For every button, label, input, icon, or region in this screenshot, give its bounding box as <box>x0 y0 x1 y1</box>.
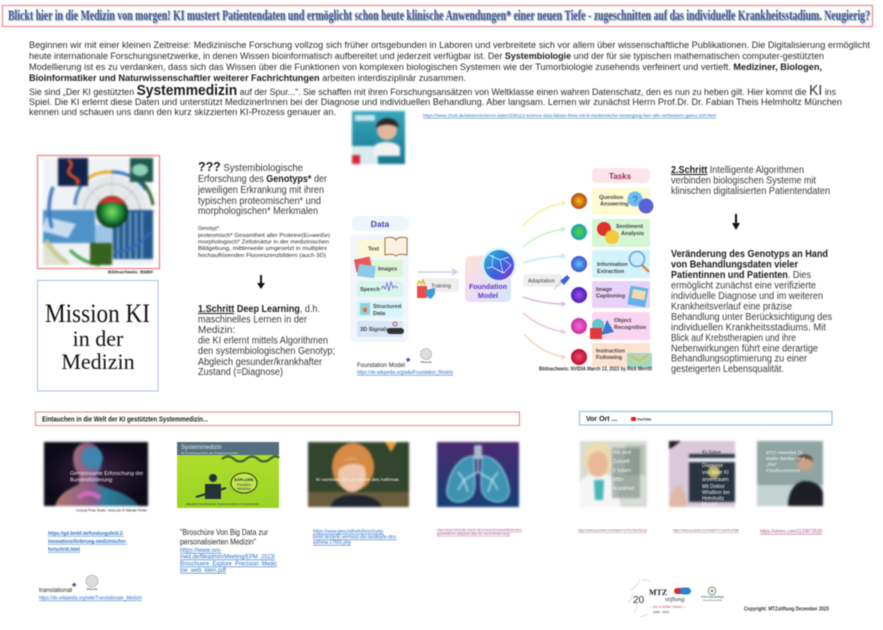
text: genotype change: Krankheitsverlauf eine präzise <box>671 302 792 312</box>
image: video AI doctor: von einer KI <box>702 470 729 476</box>
text: genotype definition <box>198 226 330 259</box>
text: genotype change: Behandlungsoptimierung zu einer <box>671 354 808 364</box>
logo: foundation seal: Deutschland 2025 <box>703 599 723 602</box>
intro text block: Bioinformatiker und Naturwissenschaftler weiterer Fachrichtungen arbeiten interdisziplinär zusammen. <box>29 73 466 84</box>
image credit: BMBF: Bildnachweis: BMBF <box>108 270 154 274</box>
text: genotype change: ermöglicht zunächst eine verifizierte <box>671 280 816 292</box>
image: human body network <box>44 442 148 506</box>
text: genotype change: Blick auf Krebstherapien und ihre <box>671 333 796 344</box>
intro text block <box>29 40 870 118</box>
panel: data: Structured <box>373 304 402 310</box>
text: step 1 deep learning: die KI erlernt mittels Algorithmen <box>198 336 328 346</box>
panel: tasks: Following <box>596 355 623 361</box>
label: translational wiki link: ★ <box>71 581 77 589</box>
image: researcher portrait <box>308 442 409 507</box>
label: foundation model wiki link: Wikipedia <box>421 361 432 364</box>
image: video MTZ award: Fraufluoreszenz <box>766 468 801 474</box>
panel: tasks: Object <box>614 318 632 324</box>
Theis portrait thumbnail <box>352 111 405 164</box>
intro text block: Spiel. Die KI erlernt diese Daten und unterstützt MedizinerInnen bei der Diagnose und individuellen Behandlung. Aber langsam. Lernen wir zunächst Herrn Prof.Dr. Dr. Fabian Theis Helmholtz München <box>29 97 842 108</box>
link: BMBF funding: https://gd-bmbf.de/fundungsfeld-2- <box>48 531 124 537</box>
text: genotype definition: Bildgebung, mittlerweile umgesetzt in multiplex <box>198 246 327 252</box>
label: foundation model wiki link: ★ <box>405 356 411 364</box>
text: genotype definition: Genotyp*: <box>198 226 220 232</box>
panel: data: Images <box>378 266 397 272</box>
link: asthma article: https://www.gesundheitsforschung- <box>313 529 384 535</box>
diagram: foundation model <box>350 168 654 368</box>
logo: MTZ stiftung <box>628 580 691 617</box>
link: asthma article: asthma-17655.php <box>313 540 351 546</box>
logo: MTZ stiftung: stiftung <box>665 596 685 603</box>
link: BMBF funding: innovationsförderung-medizinischer- <box>48 539 127 545</box>
heading: Vor Ort: YouTube <box>637 418 652 422</box>
text: brochure link: med.de/fileadmin/Meeting/EPM_2023/ <box>180 554 275 560</box>
logo: MTZ stiftung: MTZ <box>649 588 667 597</box>
panel: tasks: Information <box>597 262 628 268</box>
panel: tasks: ? <box>632 195 638 206</box>
image: video doctor: Krankheit <box>613 486 635 492</box>
text: genotype definition: proteomisch* Gesamtheit aller Proteine(Ei»weiße) <box>198 233 330 239</box>
image: human body network: Bundesförderung <box>70 478 112 484</box>
text: genotype research <box>197 159 328 217</box>
link: BMBF funding: fortschritt.html <box>48 547 81 553</box>
text: genotype research: ??? Systembiologische <box>198 159 303 174</box>
intro text block: heute internationale Forschungsnetzwerke, in denen Wissen bioinformatisch aufbereitet und jederzeit verfügbar ist. Der Systembiologie und der für sie typischen mathematischen computer-gestützten <box>29 51 824 62</box>
image: video doctor: Zukunft <box>613 459 630 465</box>
link: BMBF funding <box>48 531 127 553</box>
image: systems biology collage <box>38 156 160 268</box>
box: foundation model: Foundation <box>469 284 507 291</box>
image: brochure cover: Aktuelle Forschung der Systemmedizin in Deutschland <box>186 502 259 506</box>
arrows: adaptation to tasks <box>523 201 565 359</box>
text: brochure link <box>180 528 277 574</box>
text: genotype change: individuelle Diagnose und im weiteren <box>671 291 823 302</box>
task spheres <box>571 193 587 365</box>
image: video AI doctor: anvertrauen <box>702 477 729 483</box>
image: video AI doctor <box>669 441 735 508</box>
panel: tasks: Tasks <box>609 172 632 181</box>
text: step 1 deep learning: Zustand (=Diagnose) <box>198 367 283 378</box>
link: Helmholtz: https://www.helmholtz-munich.de/newsroom/news/artikel/ersten- <box>437 528 522 532</box>
pill: adaptation <box>523 274 570 289</box>
panel: tasks: Analysis <box>621 231 644 237</box>
logo: MTZ stiftung: 2005 - 2025 <box>653 610 669 614</box>
panel: tasks: Answering <box>600 202 629 208</box>
image: video MTZ award: „RW“ <box>766 462 778 468</box>
text: genotype change: Nebenwirkungen führt eine derartige <box>671 344 818 354</box>
links: videos: https://vimeo.com/1129872530 <box>760 529 822 535</box>
text: brochure link: ine_web_klein.pdf <box>180 568 226 574</box>
label: translational wiki link: https://de.wikipedia.org/wiki/Translationale_Medizin <box>39 596 142 602</box>
panel: data <box>350 216 409 342</box>
image: video AI doctor: KI-Salve <box>702 450 721 456</box>
text: step 2: klinischen digitalisierten Patientendaten <box>671 186 830 197</box>
image: brochure cover: EXPLORE <box>234 477 254 482</box>
text: genotype change <box>671 249 832 375</box>
logo: foundation seal: STIFTUNGSPREIS <box>701 595 724 599</box>
image: lungs <box>437 442 519 507</box>
panel: tasks: Extraction <box>597 269 625 275</box>
link: interview: https://www.1hoit.de/wissen/science-daten/230113-science-data-fabian-theis-mit-ki-medizinische-versorgung-fuer-alle-verbessern-gamu-100.html <box>423 113 716 118</box>
text: step 2 <box>671 165 830 197</box>
image: video doctor: Mitte <box>613 477 624 483</box>
links: videos: https://www.youtube.com/watch?v=FuJ3ts20Duw <box>578 528 647 532</box>
panel: Mission KI: in der <box>73 326 124 351</box>
text: brochure link: Broschuere_Explore_Precision_Medic <box>180 562 277 568</box>
links: videos: https://www.youtube.com/watch?v=xecRLxFBfs <box>673 528 739 532</box>
text: genotype research: jeweiligen Erkrankung mit ihren <box>197 185 324 196</box>
image: video MTZ award: MTZ-Awardee Dr. <box>766 450 804 456</box>
text: genotype change: Veränderung des Genotyps an Hand <box>671 249 828 260</box>
image credit: photo: Concept Photo Studio - stock.ado ID Nathalie Fichter <box>76 508 148 512</box>
label: foundation model wiki link: Foundation Model <box>357 362 406 369</box>
text: step 1 deep learning: Abgleich gesunder/krankhafter <box>198 357 323 368</box>
pill: training: Training <box>431 284 451 290</box>
panel: tasks <box>590 168 654 368</box>
text: step 1 deep learning: 1.Schritt Deep Learning, d.h. <box>198 304 320 315</box>
panel: Mission KI: Mission KI <box>45 299 150 328</box>
label: translational wiki link: Wikipedia <box>87 588 98 591</box>
panel: tasks: Question <box>599 195 624 201</box>
image: brochure cover: Precision <box>237 483 251 487</box>
text: brochure link: https://www.svs- <box>180 548 222 554</box>
image: video AI doctor: Helmholtz <box>702 496 725 502</box>
arrow: to genotype change <box>732 214 740 230</box>
link: Helmholtz <box>437 528 522 536</box>
text: step 1 deep learning: den systembiologischen Genotyp; <box>198 346 335 357</box>
image credit: NVIDIA: Bildnachweis: NVIDIA March 13, 2023 by Rick Merritt <box>539 366 652 372</box>
box: foundation model <box>465 247 517 302</box>
arrow: to step 1 <box>257 275 265 289</box>
panel: Mission KI: Medizin <box>61 349 135 374</box>
image: video AI doctor: Munich <box>702 502 718 508</box>
heading: Vor Ort: Vor Ort ... <box>586 416 617 423</box>
logo: foundation seal <box>701 587 724 602</box>
image: brochure cover: die Forschung hinter der Präzisionsmedizin <box>181 451 239 455</box>
pill: training <box>417 278 459 299</box>
panel: Mission KI <box>38 280 158 391</box>
text: genotype research: typischen proteomischen* und <box>198 196 321 207</box>
image: video doctor <box>580 441 647 507</box>
panel: tasks: Recognition <box>614 325 647 331</box>
link: asthma article: bmbf.de/de/ki-vermisst-die-landkarte-des- <box>313 534 397 540</box>
image: video doctor: 5 haben <box>613 468 631 474</box>
panel: data: Data <box>371 219 389 229</box>
label: foundation model wiki link: https://de.wikipedia.org/wiki/Foundation_Models <box>357 370 453 376</box>
text: genotype definition: morphologisch* Zellstruktur in der medizinischen <box>198 240 329 246</box>
image: human body network: Gemeinsame Erforschung der <box>70 471 144 477</box>
intro text block: kennen und schauen uns dann den kurz skizzierten KI-Prozess genauer an. <box>29 107 336 118</box>
panel: data: Data <box>373 311 386 317</box>
links: videos <box>578 528 822 535</box>
panel: tasks: Captioning <box>596 294 626 300</box>
text: genotype research: Erforschung des Genotyps* der <box>198 174 328 185</box>
text: brochure link: personalisierten Medizin" <box>180 538 256 546</box>
text: genotype research: morphologischen* Merkmalen <box>198 206 318 217</box>
image: researcher portrait: KI vermisst die Landkarte des Asthmas <box>316 477 400 483</box>
image: brochure cover <box>177 442 279 508</box>
text: step 1 deep learning <box>198 304 335 378</box>
logo: MTZ stiftung: – for a better future – <box>650 605 686 609</box>
text: genotype definition: hochauflösenden Fluoreszenzbildern (auch 3D) <box>198 253 326 259</box>
text: step 1 deep learning: Medizin: <box>198 325 235 336</box>
arrow: training <box>418 269 457 275</box>
link: asthma article <box>313 529 397 546</box>
image: video AI doctor: Mit Doktor <box>702 484 725 490</box>
logo: MTZ stiftung: 20 <box>633 595 645 606</box>
intro text block: Modellierung ist es zu verdanken, dass sich das Wissen über die Funktionen von komplexen biologischen Systemen wie der Tumorbiologie zusehends verfeinert und vertieft. Mediziner, Biologen, <box>29 62 822 73</box>
text: genotype change: Patientinnen und Patienten. Dies <box>671 270 811 281</box>
image: video MTZ award <box>757 441 823 506</box>
image: video AI doctor: Diagnose <box>702 463 723 469</box>
text: genotype change: von Behandlungsdaten vieler <box>671 260 798 270</box>
image: brochure cover: Medicine <box>237 487 251 491</box>
image: video AI doctor: Whalbon bei <box>702 490 730 496</box>
panel: data: Text <box>368 246 379 252</box>
panel: tasks: Sentiment <box>616 224 643 230</box>
text: genotype change: individuellen Krankheitsstadiums. Mit <box>671 322 826 334</box>
text: genotype change: Behandlung unter Berücksichtigung des <box>671 312 832 323</box>
link: Helmholtz: ganzheitlichen-atlasplant-atlas-der-menschlichen-lunge <box>437 532 510 536</box>
intro text block: Sie sind „Der KI gestützten Systemmedizin auf der Spur...“. Sie schaffen mit ihren Forschungsansätzen von Weltklasse einen wahren Datenschatz, den es nun zu heben gilt. Hier kommt die KI ins <box>29 82 836 99</box>
panel: data: Speech <box>360 287 380 293</box>
text: brochure link: "Broschüre Von Big Data zur <box>180 528 268 537</box>
text: genotype change: gesteigerten Lebensqualität. <box>671 364 784 375</box>
heading: Vor Ort <box>580 412 832 425</box>
text: step 2: verbinden biologischen Systeme mit <box>671 176 816 186</box>
heading: Eintauchen <box>36 412 520 426</box>
panel: data: 3D Signals <box>360 327 389 333</box>
image: brochure cover: Systemmedizin <box>181 445 222 451</box>
label: translational wiki link <box>39 575 142 602</box>
heading: Eintauchen: Eintauchen in die Welt der KI gestützten Systemmedizin... <box>42 416 208 424</box>
copyright: Copyright: MTZstiftung Dezember 2025 <box>744 606 829 612</box>
label: translational wiki link: translational <box>39 587 73 594</box>
panel: tasks: Instruction <box>596 348 625 354</box>
pill: adaptation: Adaptation <box>528 278 555 284</box>
text: step 2: 2.Schritt Intelligente Algorithmen <box>671 165 804 176</box>
image: video doctor: Wir sind <box>613 450 631 456</box>
image: video MTZ award: Maike Becker und <box>766 456 805 462</box>
box: foundation model: Model <box>478 293 498 300</box>
panel: tasks: Image <box>596 287 612 293</box>
label: foundation model wiki link <box>357 348 453 376</box>
text: step 1 deep learning: maschinelles Lernen in der <box>198 314 308 326</box>
